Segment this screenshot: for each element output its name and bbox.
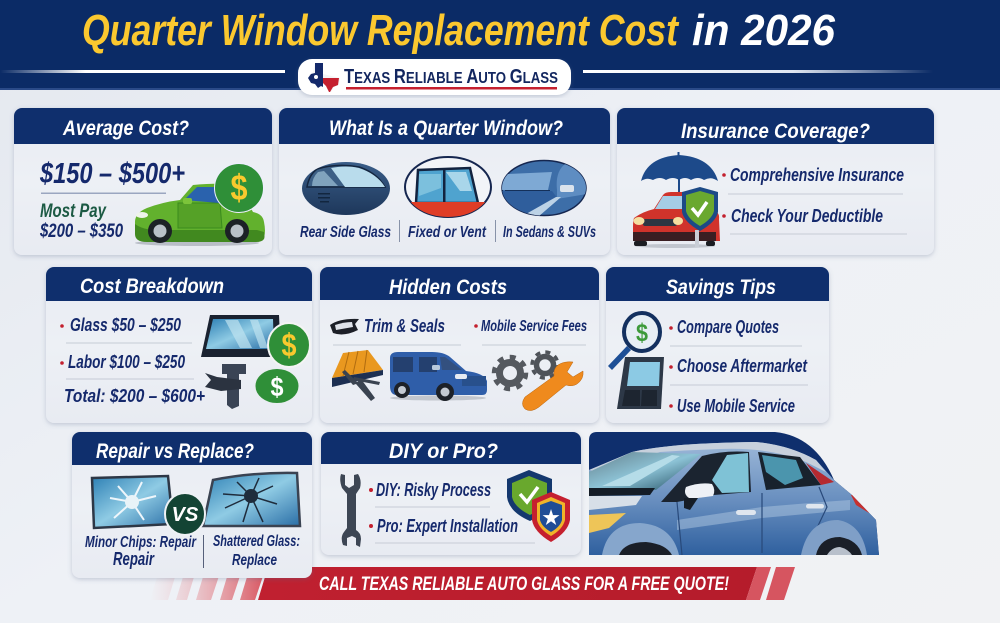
logo wordmark: TEXAS RELIABLE AUTO GLASS [344,66,558,88]
total: Total: $200 – $600+ [64,386,205,406]
icon: dollar coin: $ [270,372,284,402]
icon: magnifier: $ [636,319,648,347]
icon: red car [633,192,720,248]
tip: Choose Aftermarket [677,356,808,376]
icon: orange wrench [522,362,583,411]
icon: fixed or vent [400,157,496,218]
panel: hidden costs [320,267,599,423]
icon: green car [135,184,265,246]
heading: Hidden Costs [389,276,507,299]
icon: blue van [390,352,487,401]
DIY text: DIY: Risky Process [376,480,491,500]
panel: insurance coverage [617,108,934,255]
icon: Texas flag state [308,63,340,92]
label: Mobile Service Fees [481,318,587,335]
bullet text: Check Your Deductible [731,206,883,226]
icon: dollar coin [268,323,310,367]
panel: savings tips [606,267,829,423]
illustration: blue car [589,432,880,555]
label: Repair [113,549,155,569]
logo: Texas Reliable Auto Glass [298,59,571,95]
label: Shattered Glass: [213,533,300,550]
panel: what is a quarter window [279,108,610,255]
heading: Average Cost? [62,117,189,140]
icon: chipped glass [92,476,173,528]
icon: dollar coin [214,164,264,212]
icon: trim [330,319,359,334]
label: Replace [232,552,277,569]
label [474,318,587,335]
icon: red shield [532,492,570,542]
icon: magnifier [608,313,660,370]
heading: Cost Breakdown [80,275,224,298]
most pay: Most Pay [40,201,107,222]
icon: shield [682,187,718,231]
panel: repair vs replace [72,432,312,578]
header band [0,0,1000,90]
heading: DIY or Pro? [389,440,498,463]
icon: shattered glass [203,473,300,526]
labor cost: Labor $100 – $250 [68,352,185,372]
icon: green shield [507,470,552,521]
icon: umbrella [641,152,718,194]
label: Trim & Seals [364,316,445,336]
icon: dollar coin [255,368,299,404]
heading: Insurance Coverage? [681,120,870,143]
icon: sedans and SUVs [502,160,587,216]
icon: dollar coin: $ [230,167,248,208]
label: Rear Side Glass [300,224,391,241]
panel: average cost [14,108,272,255]
label: Minor Chips: Repair [85,534,197,551]
banner text: CALL TEXAS RELIABLE AUTO GLASS FOR A FREE QUOTE! [319,574,729,595]
icon: vs badge: VS [172,504,199,526]
icon: orange trim and screwdriver [332,350,383,401]
panel: cost breakdown [46,267,312,423]
icon: tools [205,364,246,409]
icon: glass pane [201,315,281,357]
title: in 2026 [692,6,835,55]
icon: dollar coin: $ [282,327,297,363]
icon: wrench [340,474,361,547]
icon: rear side glass [302,162,390,215]
cost range: $150 – $500+ [39,158,185,190]
icon: phone with glass [617,357,664,409]
heading: Savings Tips [666,276,776,299]
Pro text [369,516,518,536]
DIY text [369,480,491,500]
icon: vs badge [165,493,205,535]
heading: Repair vs Replace? [96,440,254,463]
label: In Sedans & SUVs [503,224,596,241]
heading: What Is a Quarter Window? [329,117,563,140]
label: Fixed or Vent [408,224,487,241]
tip: Use Mobile Service [677,396,795,416]
icon: gears [494,352,558,389]
icon: red shield: ★ [542,508,560,529]
bullet text: Comprehensive Insurance [730,165,904,185]
tip [669,396,795,416]
title: Quarter Window Replacement Cost [82,6,680,55]
panel: DIY or Pro [321,432,581,555]
Pro text: Pro: Expert Installation [377,516,518,536]
tip: Compare Quotes [677,317,779,337]
tip [669,317,779,337]
glass cost: Glass $50 – $250 [70,315,181,335]
typical range: $200 – $350 [39,221,123,242]
call to action banner [150,567,795,600]
